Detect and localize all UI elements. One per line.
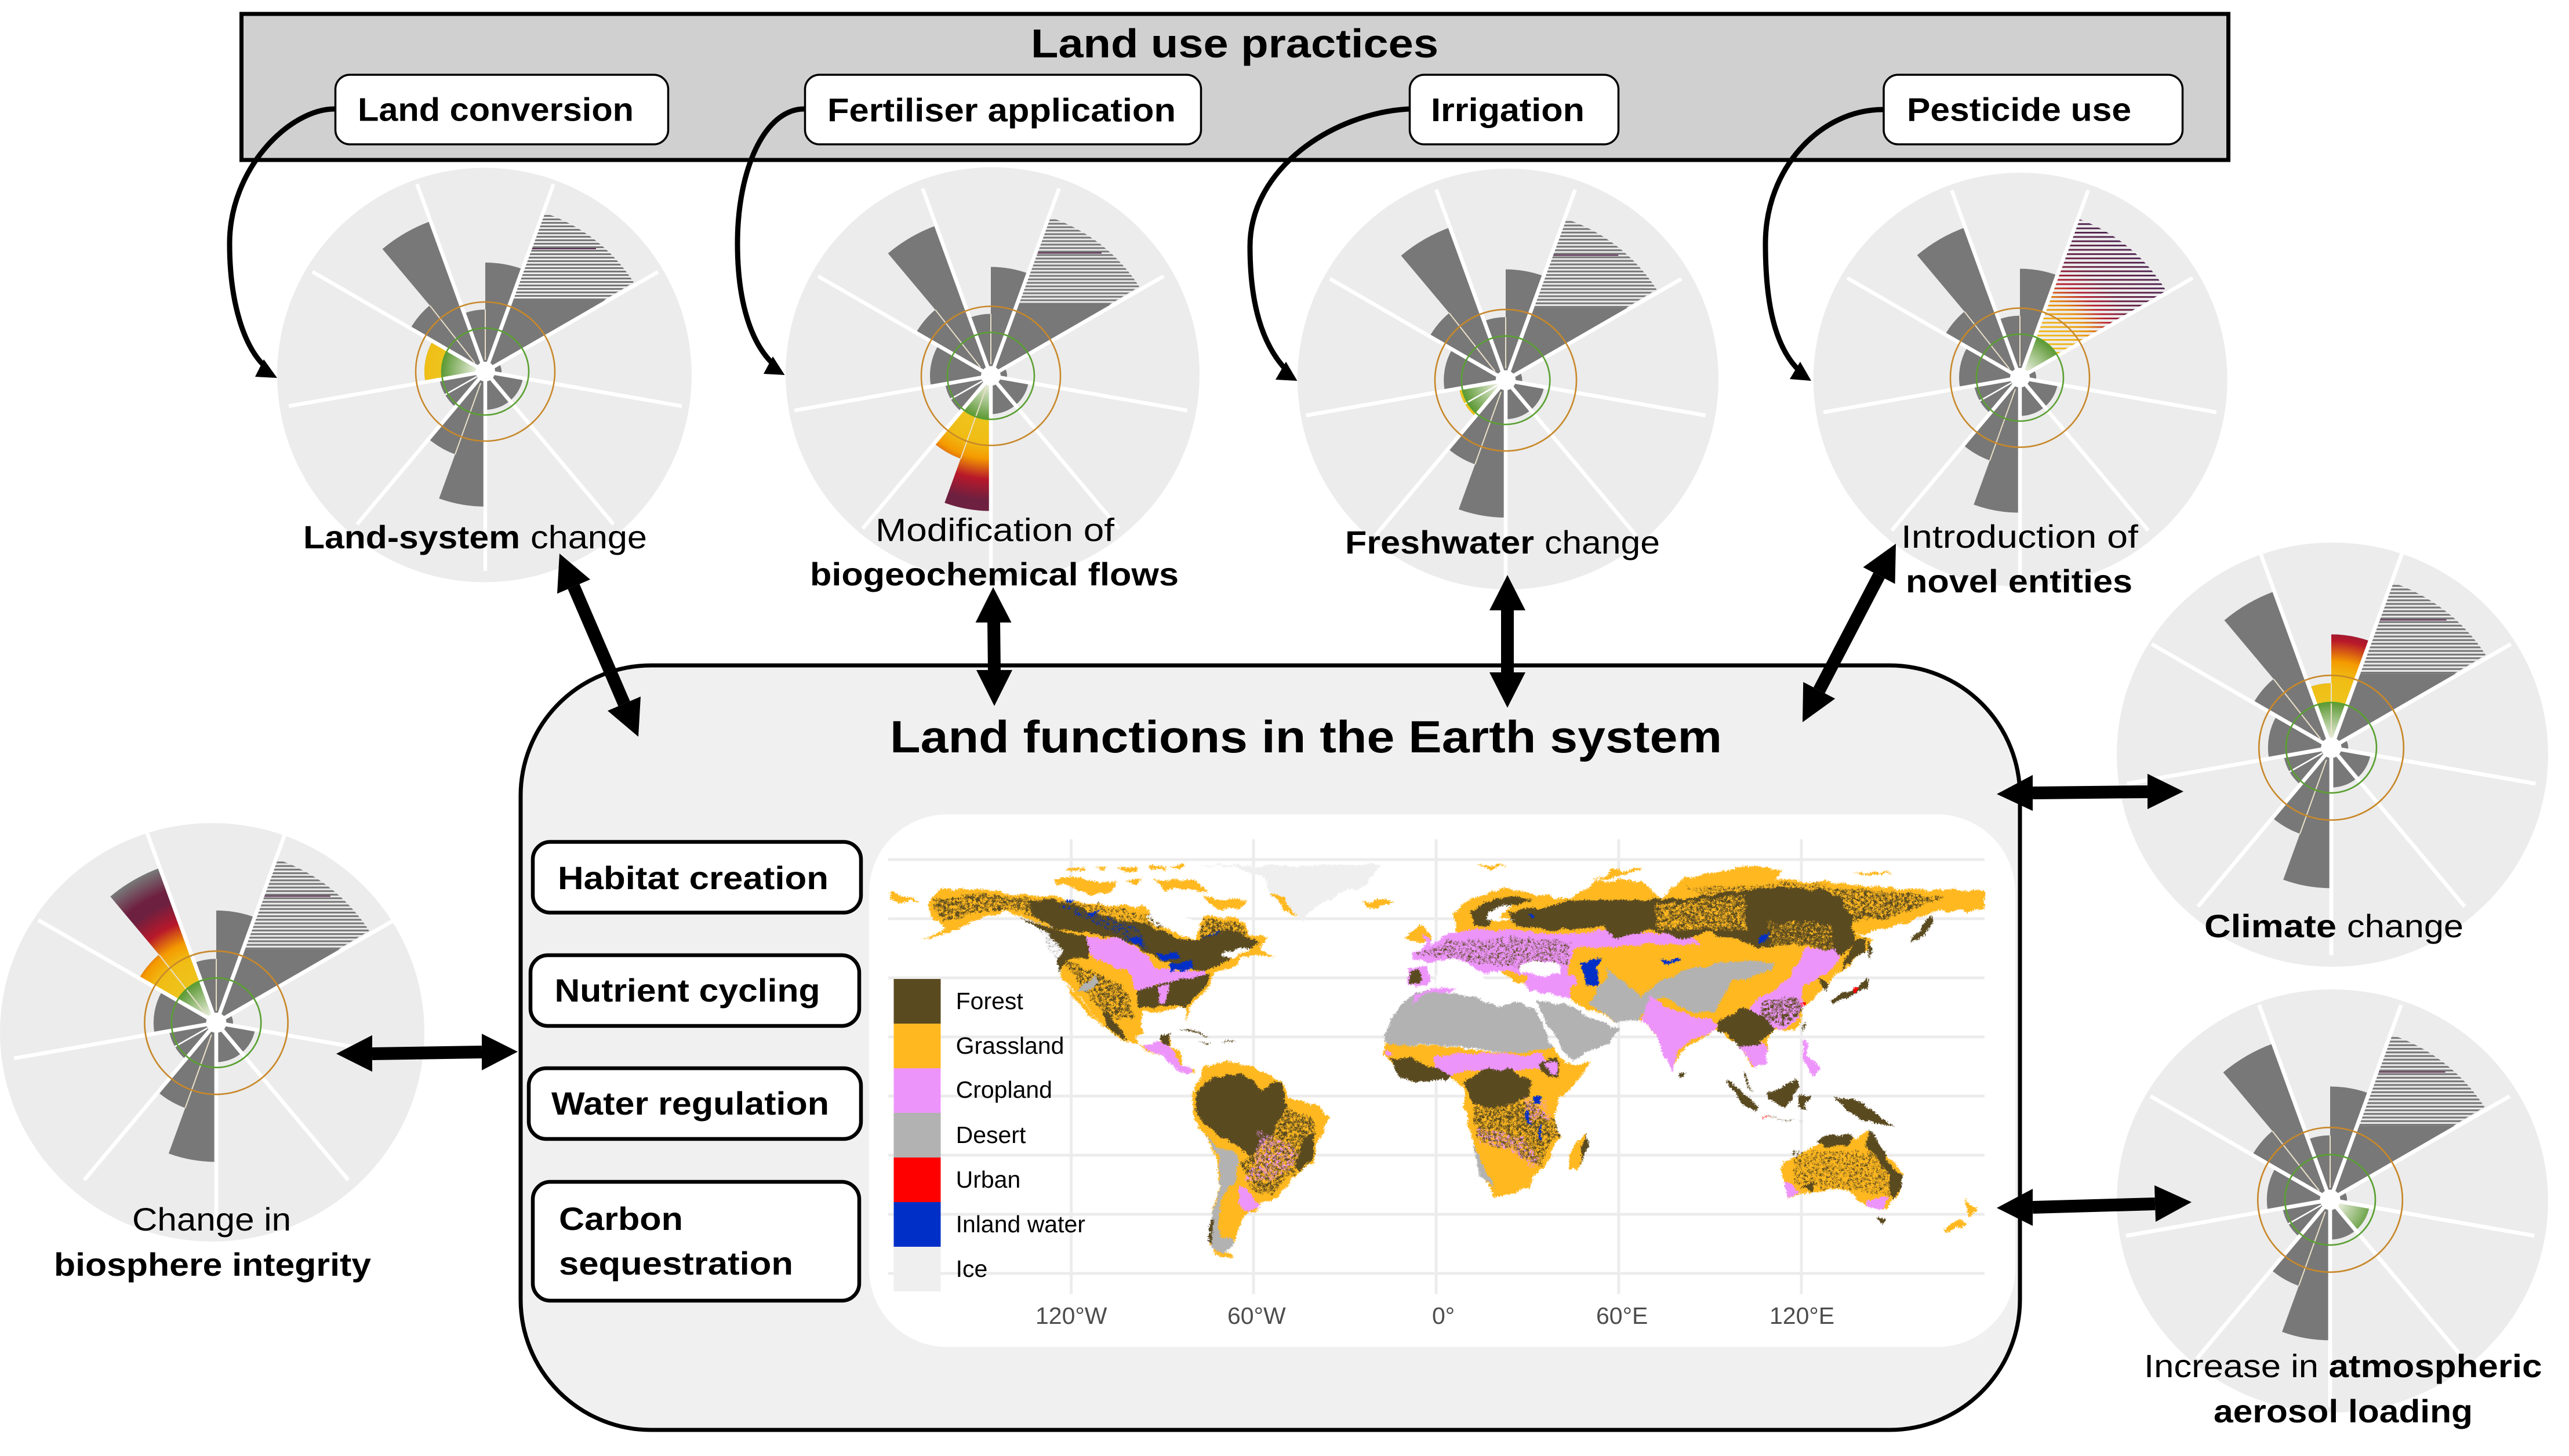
double arrow: freshwater change and land functions [1489, 575, 1525, 708]
label: freshwater change: change [1545, 524, 1660, 560]
label: novel entities: Introduction of [1901, 518, 2138, 555]
double arrow: novel entities and land functions [1803, 544, 1896, 722]
legend: Urban [956, 1166, 1020, 1193]
box: fertiliser application: Fertiliser application [827, 92, 1176, 129]
heading: land functions: Land functions in the Earth system [890, 711, 1722, 762]
heading: land use practices: Land use practices [1031, 21, 1438, 66]
map: mottled forest Siberia [1656, 887, 1945, 930]
label: biogeochemical flows [810, 512, 1179, 592]
wheel: biogeochemical flows [786, 167, 1200, 581]
label: atmospheric aerosol loading [2144, 1348, 2542, 1429]
box: habitat creation: Habitat creation [558, 860, 829, 896]
label: atmospheric aerosol loading: Increase in [2144, 1348, 2319, 1384]
map axis labels: 60°E [1596, 1302, 1648, 1329]
legend: Desert [956, 1122, 1026, 1148]
map: Arabia [1536, 1000, 1618, 1059]
box: carbon sequestration: sequestration [559, 1245, 793, 1282]
legend: Inland water [956, 1211, 1085, 1237]
box: irrigation: Irrigation [1431, 92, 1585, 129]
wheel: novel entities [1814, 173, 2228, 587]
double arrow: aerosol loading and land functions [1997, 1185, 2192, 1226]
wheel: atmospheric aerosol loading [2117, 989, 2548, 1413]
curved arrow: irrigation to freshwater change [1250, 109, 1409, 381]
legend: Cropland [956, 1076, 1052, 1103]
wheel: climate change [2117, 543, 2548, 967]
box: pesticide use: Pesticide use [1907, 92, 2131, 129]
box: water regulation [529, 1068, 861, 1139]
label: biogeochemical flows: biogeochemical flows [810, 556, 1179, 592]
map: mottled forest southern Africa [1471, 1100, 1560, 1166]
map: South America [1191, 1063, 1330, 1257]
label: climate change [2204, 908, 2463, 944]
panel: world land cover map [869, 814, 2015, 1347]
legend: Ice [956, 1255, 987, 1282]
label: atmospheric aerosol loading: aerosol loading [2214, 1393, 2473, 1429]
map: Eurasia base [1451, 867, 1984, 1071]
map: mottled forest North America [932, 894, 1251, 1018]
box: land conversion [335, 75, 668, 144]
map axis labels: 0° [1432, 1302, 1455, 1329]
double arrow: biogeochemical flows and land functions [976, 587, 1012, 706]
double arrow: biosphere integrity and land functions [336, 1034, 518, 1072]
map: Africa, Eurasia and Oceania [1383, 865, 1984, 1233]
map: Australia and New Zealand [1782, 1130, 1903, 1209]
legend [894, 979, 1085, 1291]
map axis labels: 120°W [1035, 1302, 1107, 1329]
box: irrigation [1410, 75, 1619, 144]
box: nutrient cycling: Nutrient cycling [554, 972, 820, 1009]
panel: land functions in the Earth system [521, 665, 2020, 1430]
map: Americas [888, 865, 1395, 1257]
box: water regulation: Water regulation [551, 1085, 829, 1122]
label: land-system change [303, 519, 647, 555]
double arrow: climate change and land functions [1997, 774, 2183, 811]
box: carbon sequestration: Carbon [559, 1200, 683, 1237]
label: freshwater change [1345, 524, 1660, 560]
map: mottled forest Europe [1412, 937, 1572, 967]
label: climate change: change [2347, 908, 2463, 944]
label: land-system change: Land-system [303, 519, 520, 555]
box: nutrient cycling [530, 955, 859, 1026]
curved arrow: land conversion to land-system change [230, 109, 335, 378]
map axis labels: 60°W [1227, 1302, 1286, 1329]
box: habitat creation [533, 842, 861, 912]
map: mottled forest Australia [1793, 1152, 1889, 1196]
box: land conversion: Land conversion [358, 92, 634, 129]
label: climate change: Climate [2204, 908, 2337, 944]
wheel: land-system change [277, 168, 692, 582]
wheel: freshwater change [1298, 169, 1718, 589]
label: biosphere integrity: biosphere integrity [54, 1246, 371, 1283]
map: mottled forest South America [1240, 1107, 1316, 1196]
panel: land use practices [241, 14, 2229, 160]
label: novel entities [1901, 518, 2138, 599]
box: pesticide use [1884, 75, 2182, 144]
box: carbon sequestration [533, 1182, 859, 1301]
label: freshwater change: Freshwater [1345, 524, 1534, 560]
legend: Forest [956, 988, 1023, 1014]
map axis labels [1035, 1302, 1834, 1329]
label: biosphere integrity: Change in [132, 1201, 291, 1237]
label: novel entities: novel entities [1906, 563, 2132, 599]
legend: Grassland [956, 1032, 1064, 1059]
double arrow: land-system change and land functions [557, 554, 641, 737]
curved arrow: fertiliser to biogeochemical flows [737, 109, 804, 375]
wheel: biosphere integrity [0, 823, 424, 1242]
label: biosphere integrity [54, 1201, 371, 1283]
curved arrow: pesticide to novel entities [1765, 110, 1883, 381]
label: land-system change: change [530, 519, 647, 555]
map axis labels: 120°E [1769, 1302, 1834, 1329]
box: fertiliser application [805, 75, 1201, 144]
map: land cover shapes [888, 865, 1984, 1257]
label: biogeochemical flows: Modification of [875, 512, 1114, 548]
label: atmospheric aerosol loading: atmospheric [2328, 1348, 2542, 1384]
map: mottled forest southern China [1760, 996, 1804, 1026]
